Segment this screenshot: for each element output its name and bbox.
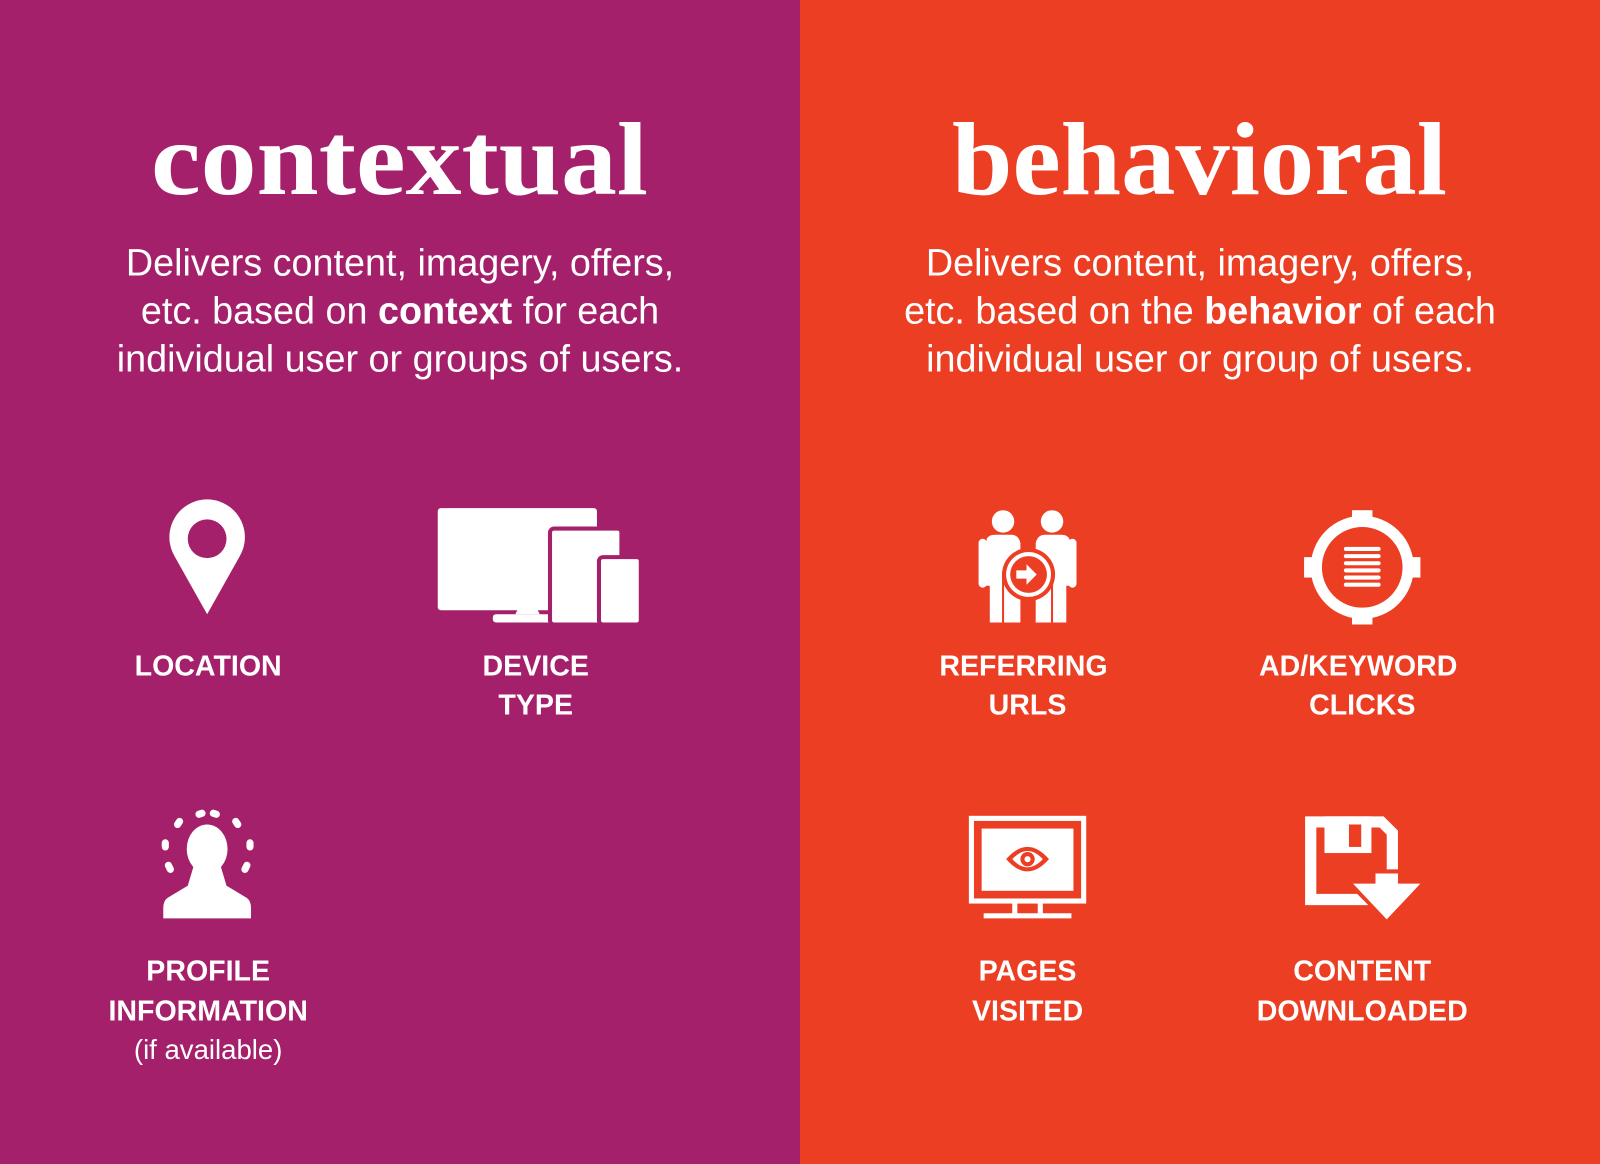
label: pages visited: VISITED [972,995,1083,1027]
label: location: LOCATION [135,651,282,683]
text block: behavioral description [904,242,1496,379]
label: ad/keyword clicks: AD/KEYWORD [1259,651,1457,683]
label: content downloaded [1257,956,1468,1027]
title: contextual: contextual [151,101,648,217]
label: ad/keyword clicks [1259,651,1457,721]
title: behavioral: behavioral [952,101,1447,217]
label: profile information: INFORMATION [108,995,308,1027]
text block: behavioral description: Delivers content, imagery, offers, [926,242,1474,284]
label: content downloaded: DOWNLOADED [1257,995,1468,1027]
label: referring urls: URLS [989,689,1066,721]
label: device type [483,651,589,721]
label: profile information: (if available) [134,1034,282,1065]
label: referring urls [939,651,1108,721]
text block: contextual description: individual user or groups of users. [117,337,683,379]
label: profile information [108,956,308,1065]
icon: content downloaded [1305,816,1420,919]
label: content downloaded: CONTENT [1293,956,1432,988]
icon: location pin [169,499,245,614]
panel: contextual [0,0,800,1164]
label: referring urls: REFERRING [939,651,1108,683]
label: device type: DEVICE [483,651,589,683]
text block: contextual description: Delivers content, imagery, offers, [126,242,674,284]
icon: ad/keyword clicks [1304,510,1420,624]
text block: behavioral description: etc. based on the behavior of each [904,289,1496,331]
icon: pages visited [971,818,1084,918]
text block: contextual description: etc. based on context for each [141,289,659,331]
label: profile information: PROFILE [146,956,270,988]
panel: behavioral [800,0,1600,1164]
label: ad/keyword clicks: CLICKS [1309,689,1415,721]
icon: referring urls [979,510,1077,622]
label: pages visited [972,956,1083,1027]
icon: device type [438,508,641,624]
label: pages visited: PAGES [979,956,1076,988]
label: device type: TYPE [498,689,573,721]
icon: profile [163,813,251,918]
text block: contextual description [117,242,683,379]
text block: behavioral description: individual user or group of users. [926,337,1474,379]
